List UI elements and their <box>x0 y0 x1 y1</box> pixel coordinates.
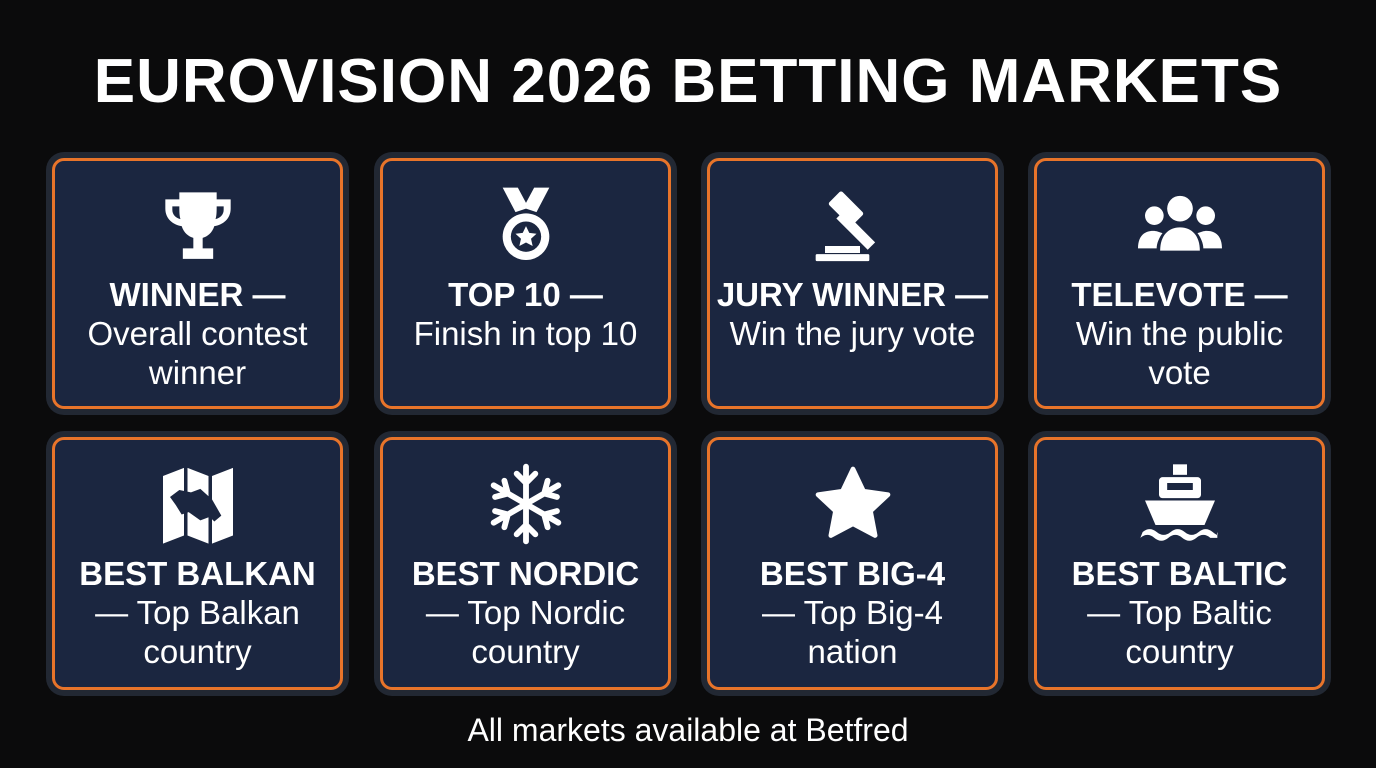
card: top 10 <box>380 158 671 409</box>
text: TELEVOTE — <box>1071 276 1288 313</box>
icon: trophy <box>165 192 231 259</box>
text: BEST BIG-4 <box>760 555 945 592</box>
text: country <box>143 633 252 670</box>
text: JURY WINNER — <box>717 276 988 313</box>
text <box>79 555 316 670</box>
text: country <box>1125 633 1234 670</box>
card: best balkan <box>52 437 343 690</box>
card: best nordic <box>380 437 671 690</box>
text: vote <box>1148 354 1211 391</box>
text: — Top Big-4 <box>762 594 943 631</box>
text: Win the jury vote <box>730 315 975 352</box>
icon: people <box>1138 196 1222 251</box>
card: jury winner <box>707 158 998 409</box>
text: Win the public <box>1076 315 1283 352</box>
card: best big-4 <box>707 437 998 690</box>
icon: medal <box>502 188 550 260</box>
icon: snowflake <box>490 464 562 544</box>
icon: ship <box>1140 464 1218 541</box>
text <box>760 555 945 670</box>
text: country <box>471 633 580 670</box>
text <box>87 276 308 391</box>
text: BEST NORDIC <box>412 555 639 592</box>
card: best baltic <box>1034 437 1325 690</box>
text <box>1072 555 1287 670</box>
title: EUROVISION 2026 BETTING MARKETS <box>94 47 1282 116</box>
text <box>412 555 639 670</box>
text: — Top Baltic <box>1087 594 1272 631</box>
text <box>1071 276 1288 391</box>
icon: gavel <box>816 192 876 262</box>
text: Finish in top 10 <box>414 315 637 352</box>
footer: All markets available at Betfred <box>467 712 909 748</box>
card: televote <box>1034 158 1325 409</box>
text: Overall contest <box>87 315 308 352</box>
card: winner <box>52 158 343 409</box>
text: TOP 10 — <box>448 276 603 313</box>
icon: star <box>816 466 890 538</box>
text <box>717 276 988 352</box>
text: WINNER — <box>110 276 286 313</box>
text: — Top Balkan <box>95 594 300 631</box>
text: nation <box>808 633 897 670</box>
text <box>414 276 637 352</box>
text: winner <box>149 354 246 391</box>
text: — Top Nordic <box>426 594 625 631</box>
icon: map <box>163 468 233 544</box>
text: BEST BALKAN <box>79 555 316 592</box>
text: BEST BALTIC <box>1072 555 1287 592</box>
